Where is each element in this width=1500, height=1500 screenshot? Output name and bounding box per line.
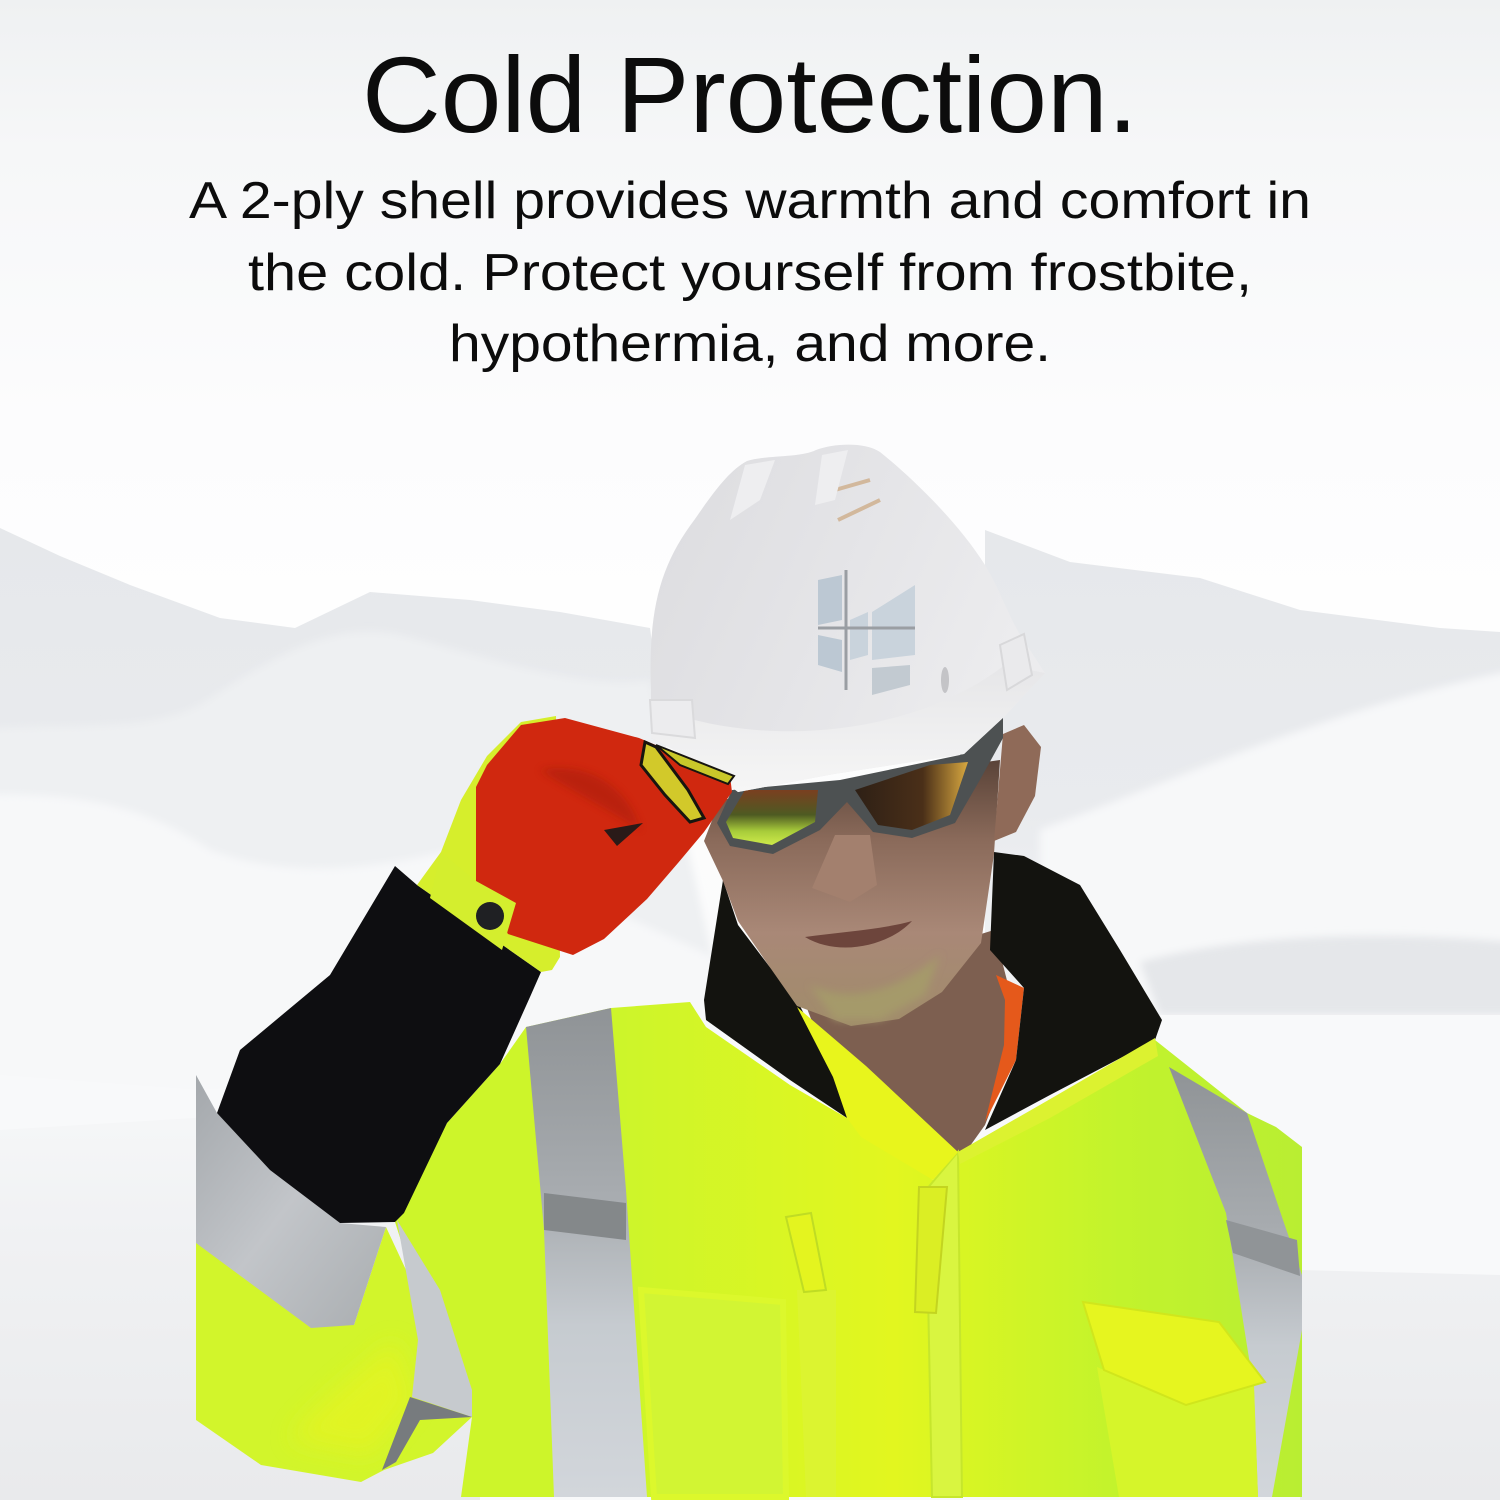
worker in hi-vis jacket (196, 445, 1302, 1497)
glove seam patch (604, 823, 643, 846)
zipper placket (926, 1152, 962, 1497)
reflective stripe: right shoulder (1169, 1067, 1302, 1497)
jacket body (395, 1002, 1302, 1497)
chest pocket (641, 1290, 786, 1497)
right stripe buckle (1226, 1220, 1300, 1276)
sleeve highlight (290, 1340, 415, 1455)
glove wrist (417, 716, 560, 972)
description text (189, 172, 1311, 373)
sunglasses (717, 711, 1003, 854)
orange lanyard (985, 975, 1024, 1122)
mouth (805, 921, 912, 948)
chin stubble (810, 955, 940, 1020)
sleeve (196, 1227, 472, 1482)
red glove (476, 718, 732, 955)
lower pocket (1097, 1367, 1258, 1497)
jacket collar flap (797, 1007, 958, 1180)
sleeve reflective band (196, 1075, 386, 1328)
description text: A 2-ply shell provides warmth and comfort in (189, 172, 1311, 230)
neck (800, 930, 1012, 1160)
inner sleeve stripe (397, 1220, 472, 1417)
hard hat (650, 445, 1045, 792)
zipper seam (797, 1290, 836, 1497)
helmet window reflection (818, 480, 915, 695)
glove knuckle pads (641, 742, 704, 822)
lower pocket flap (1083, 1302, 1265, 1405)
wrist snap (476, 902, 504, 930)
black arm cuff (217, 866, 541, 1223)
zipper pull (915, 1187, 947, 1313)
helmet side tab right (1000, 634, 1032, 690)
face (704, 760, 1000, 1026)
nose (812, 835, 877, 902)
collar zipper band (958, 1038, 1158, 1164)
pen pocket tab (786, 1213, 826, 1292)
glove shading (540, 768, 640, 830)
stripe buckle (544, 1193, 626, 1240)
helmet brim (651, 665, 1045, 792)
helmet slot (941, 667, 949, 693)
description text: hypothermia, and more. (449, 315, 1051, 373)
title: Cold Protection. (362, 34, 1138, 155)
wrist tab (430, 852, 516, 950)
description text: the cold. Protect yourself from frostbite, (248, 244, 1252, 302)
reflective stripe: shoulder vertical (526, 1008, 647, 1497)
black collar (704, 852, 1162, 1130)
glove finger strip (656, 745, 734, 784)
ear (994, 725, 1041, 841)
dark sleeve fold (382, 1397, 472, 1470)
helmet side tab left (650, 700, 695, 738)
helmet vent ridges (730, 450, 848, 520)
